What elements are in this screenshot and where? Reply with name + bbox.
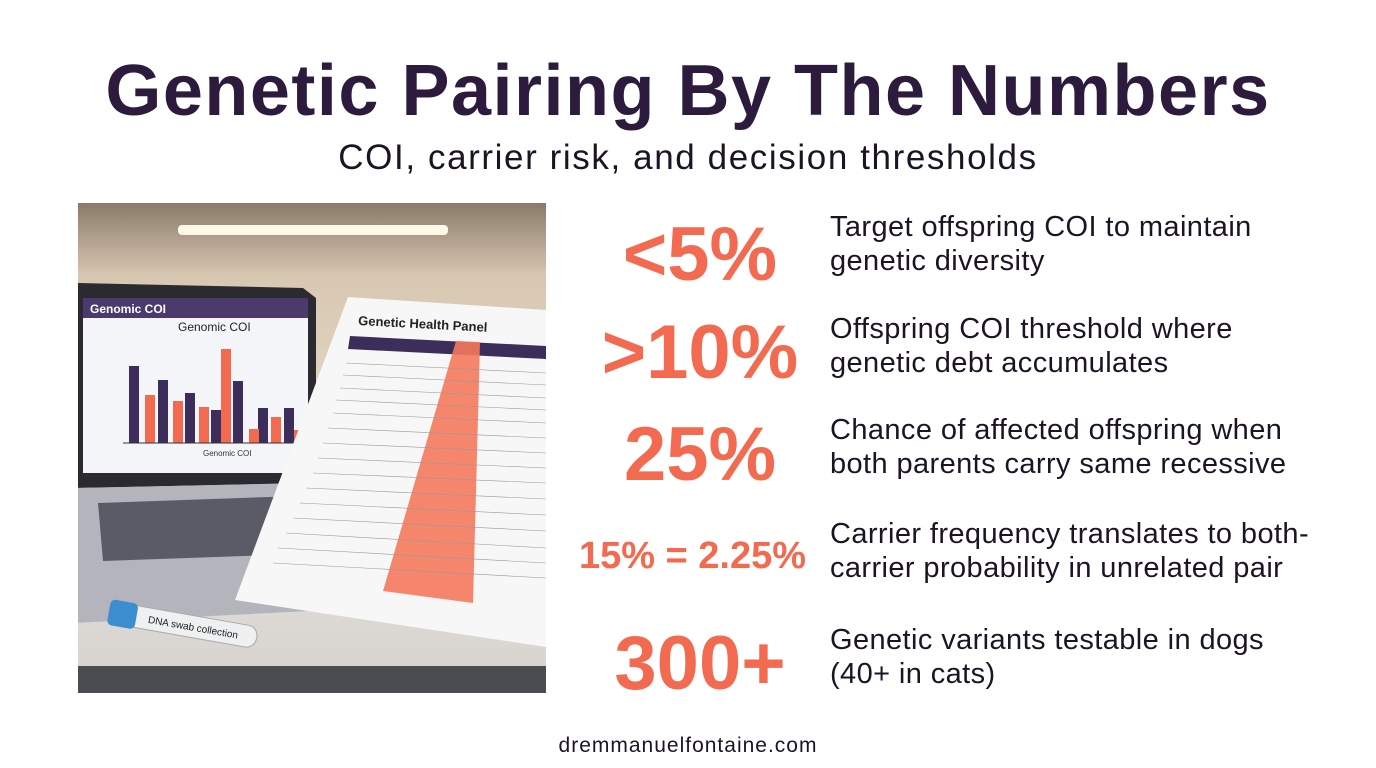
text: Offspring COI threshold where <box>830 313 1233 345</box>
text: genetic debt accumulates <box>830 347 1168 379</box>
laptop: Genomic COI <box>178 320 251 334</box>
photo: laptop and genetic health panel <box>78 203 546 693</box>
stat 1 <box>623 211 1252 297</box>
text: Target offspring COI to maintain <box>830 211 1252 243</box>
stat 4 <box>579 518 1309 584</box>
text: Genetic variants testable in dogs <box>830 624 1264 656</box>
swab tube: DNA swab collection <box>147 615 239 641</box>
stat 2 <box>602 310 1233 395</box>
paper: Genetic Health Panel <box>358 313 488 335</box>
text: carrier probability in unrelated pair <box>830 552 1283 584</box>
title: Genetic Pairing By The Numbers <box>105 51 1271 131</box>
swab tube <box>107 599 259 651</box>
stat 5 <box>614 621 1264 706</box>
text: >10% <box>602 310 798 395</box>
text: 300+ <box>614 621 786 706</box>
paper <box>235 297 546 647</box>
laptop: Genomic COI <box>90 302 166 316</box>
text: Chance of affected offspring when <box>830 414 1282 446</box>
subtitle: COI, carrier risk, and decision thresholds <box>338 138 1038 177</box>
footer url: dremmanuelfontaine.com <box>559 734 817 757</box>
text: both parents carry same recessive <box>830 448 1286 480</box>
laptop: Genomic COI <box>203 449 251 458</box>
text: 15% = 2.25% <box>579 535 806 577</box>
text: 25% <box>624 412 776 497</box>
laptop <box>73 283 368 623</box>
text: <5% <box>623 212 777 297</box>
text: Carrier frequency translates to both- <box>830 518 1309 550</box>
text: (40+ in cats) <box>830 658 996 690</box>
text: genetic diversity <box>830 245 1045 277</box>
stat 3 <box>624 412 1286 497</box>
